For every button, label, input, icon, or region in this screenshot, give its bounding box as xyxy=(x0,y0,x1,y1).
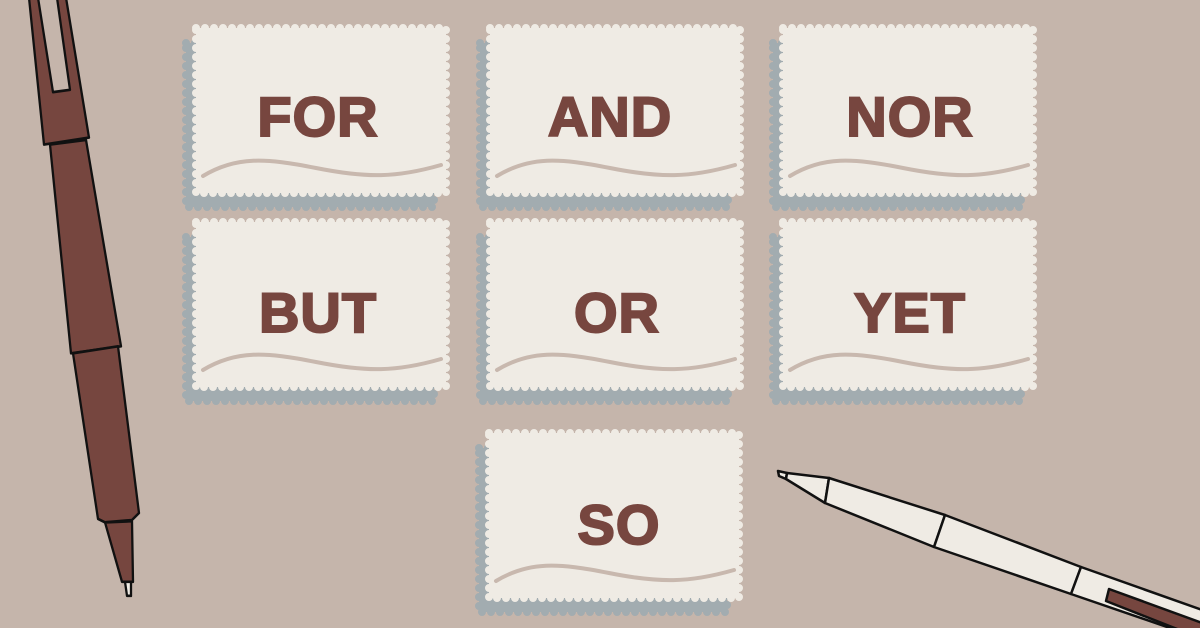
card: SO xyxy=(479,433,739,612)
card: BUT xyxy=(186,222,446,401)
card: NOR xyxy=(773,28,1033,207)
card: YET: YET xyxy=(854,281,966,344)
card: FOR: FOR xyxy=(257,85,379,148)
card: BUT: BUT xyxy=(259,281,377,344)
card: YET xyxy=(773,222,1033,401)
card: NOR: NOR xyxy=(846,85,974,148)
card: OR: OR xyxy=(574,281,660,344)
card: SO: SO xyxy=(578,493,660,556)
left brown pen xyxy=(29,0,139,596)
card: AND: AND xyxy=(548,85,672,148)
card: FOR xyxy=(186,28,446,207)
card: OR xyxy=(480,222,740,401)
right cream pen xyxy=(778,471,1200,628)
card: AND xyxy=(480,28,740,207)
